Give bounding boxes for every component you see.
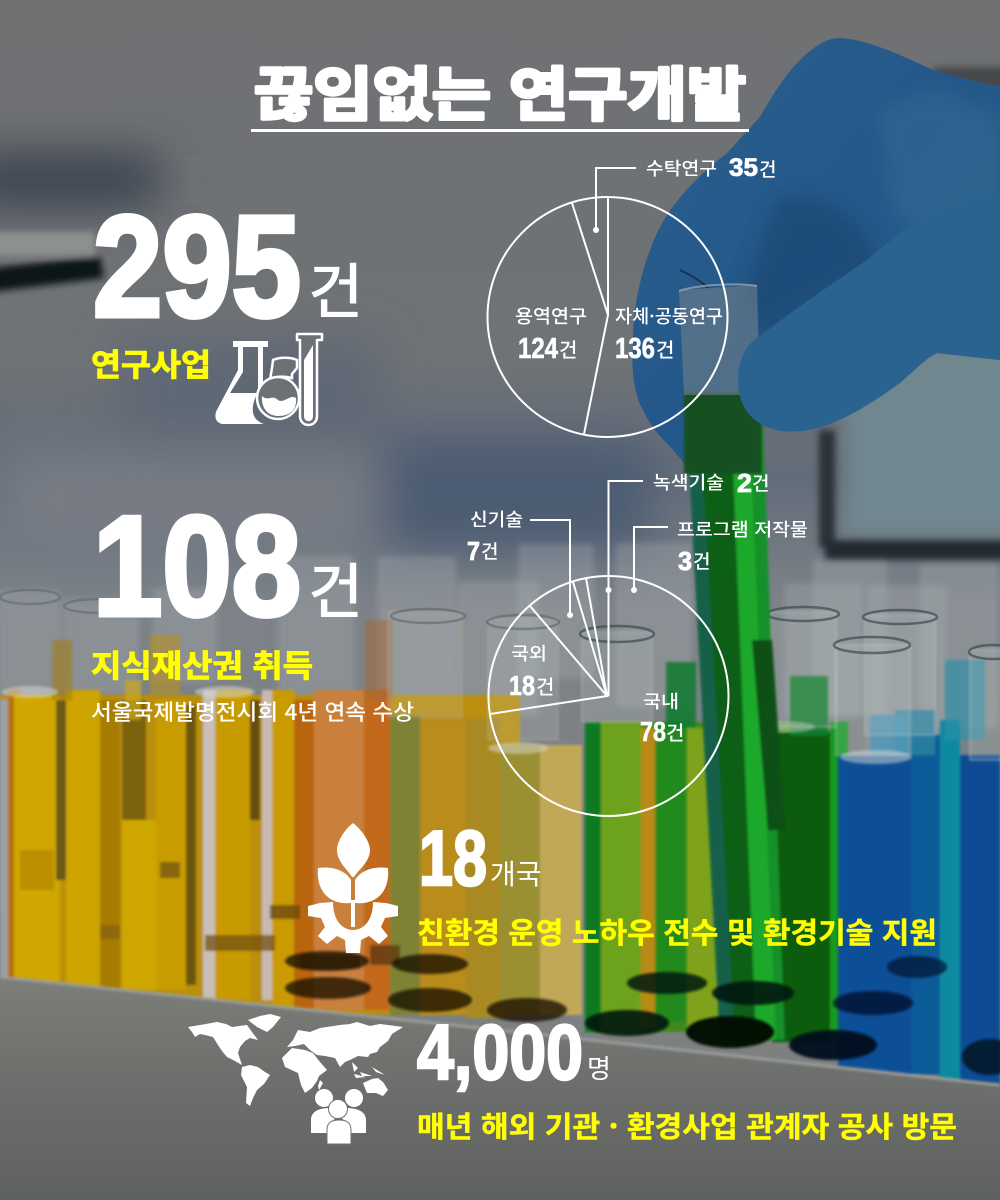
icon: plant and gear	[308, 823, 398, 953]
stat: intellectual property: 건	[308, 544, 363, 631]
pie chart: intellectual property breakdown	[488, 481, 728, 816]
pie label: software copyright: 건	[693, 547, 710, 574]
pie label: contract research: 35	[729, 154, 758, 182]
stat: intellectual property	[91, 487, 414, 727]
pie label: green technology: 녹색기술	[653, 469, 724, 495]
pie label: in-house and joint research: 자체·공동연구	[615, 303, 723, 329]
pie label: in-house and joint research	[615, 303, 723, 365]
pie label: new technology	[467, 506, 523, 566]
pie label: domestic: 국내	[643, 688, 679, 714]
icon: lab flasks	[215, 334, 322, 425]
stat: research projects: 건	[308, 244, 363, 331]
stat: visitors: 4,000	[417, 1008, 583, 1096]
pie label: contract research: 건	[759, 155, 776, 182]
pie label: domestic: 건	[666, 717, 684, 746]
pie label: overseas: 국외	[511, 640, 547, 666]
pie label: overseas: 18	[509, 670, 535, 701]
pie label: software copyright: 3	[678, 546, 692, 576]
dark holes in tube rack	[285, 951, 1000, 1075]
stat: research projects: 295	[93, 186, 301, 347]
pie label: new technology: 건	[481, 537, 498, 564]
back row empty glass tubes	[0, 545, 996, 748]
icon: world map and people	[188, 1014, 403, 1144]
stat: research projects: 연구사업	[91, 340, 211, 385]
pie label: green technology: 건	[752, 469, 769, 496]
pie label: domestic: 78	[640, 716, 666, 747]
stat: visitors	[417, 1008, 957, 1146]
front glass tubes	[388, 612, 1000, 760]
blue liquid tubes	[838, 660, 1000, 1085]
pie chart: research project breakdown	[488, 168, 728, 437]
pie label: new technology: 신기술	[470, 506, 523, 532]
stat: intellectual property: 108	[93, 487, 301, 646]
pie label: contract research: 수탁연구	[646, 155, 717, 181]
pie label: overseas: 건	[536, 671, 554, 700]
pie label: in-house and joint research: 136	[615, 333, 655, 365]
yellow and amber liquid tubes	[0, 690, 582, 1018]
green liquid tubes	[585, 662, 848, 1042]
stat: countries: 18	[419, 814, 487, 902]
pie label: green technology: 2	[737, 468, 752, 498]
pie label: new technology: 7	[467, 536, 480, 566]
pie label: overseas	[509, 640, 554, 701]
pie label: software copyright: 프로그램 저작물	[677, 516, 808, 542]
pie label: service research	[515, 303, 587, 365]
stat: intellectual property: 지식재산권 취득	[91, 641, 313, 686]
pie label: service research: 건	[559, 334, 577, 363]
pie label: green technology	[653, 468, 769, 498]
title: 끊임없는 연구개발	[254, 48, 746, 132]
centre held green tube and glove	[632, 38, 1000, 1040]
pie label: contract research	[646, 154, 776, 182]
pie label: service research: 용역연구	[515, 303, 587, 329]
glass tube top	[679, 285, 760, 395]
stat: countries	[417, 814, 937, 952]
pie label: software copyright	[677, 516, 808, 576]
pie label: service research: 124	[518, 333, 558, 365]
stat: visitors: 매년 해외 기관 · 환경사업 관계자 공사 방문	[417, 1104, 957, 1146]
pie label: in-house and joint research: 건	[656, 334, 674, 363]
stat: countries: 개국	[490, 853, 542, 893]
stat: countries: 친환경 운영 노하우 전수 및 환경기술 지원	[417, 910, 937, 952]
pie label: domestic	[640, 688, 684, 747]
stat: intellectual property: 서울국제발명전시회 4년 연속 수상	[91, 695, 414, 727]
table top	[0, 977, 1000, 1200]
stat: visitors: 명	[587, 1049, 611, 1086]
